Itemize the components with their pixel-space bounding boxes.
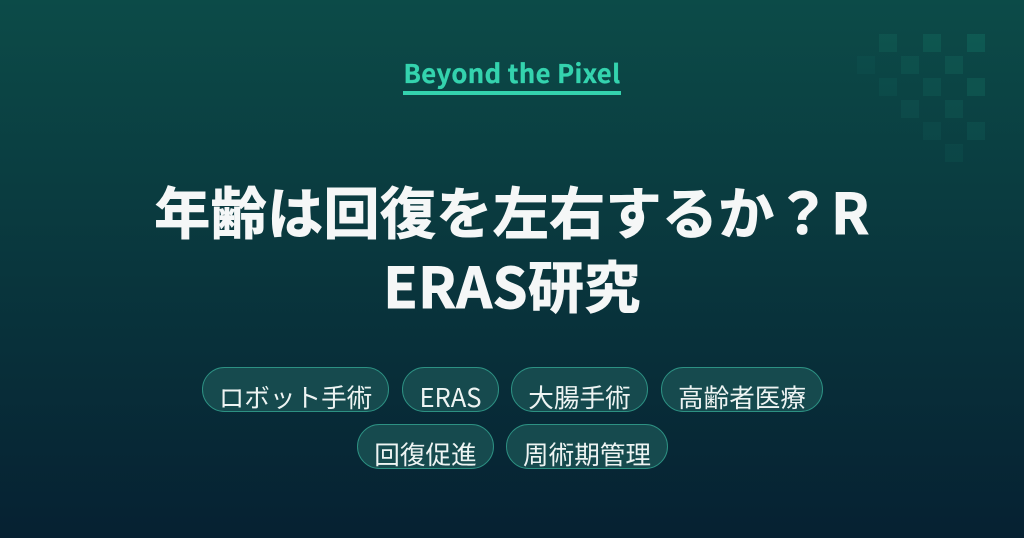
tag: 周術期管理: [506, 424, 668, 469]
tag: 高齢者医療: 高齢者医療: [678, 378, 806, 415]
tag: 回復促進: 回復促進: [374, 435, 477, 472]
decorative pixel grid icon: [879, 34, 985, 140]
tag: ERAS: [402, 367, 499, 412]
tag: ロボット手術: [202, 367, 389, 412]
title: [154, 170, 870, 325]
tag: 周術期管理: 周術期管理: [523, 435, 651, 472]
tag: 大腸手術: 大腸手術: [528, 378, 631, 415]
title: ERAS研究: [383, 244, 641, 325]
brand label: Beyond the Pixel: Beyond the Pixel: [403, 54, 621, 91]
tag: ERAS: ERAS: [419, 378, 482, 415]
tag: ロボット手術: ロボット手術: [219, 378, 372, 415]
tag: 高齢者医療: [661, 367, 823, 412]
tag: 回復促進: [357, 424, 494, 469]
tag: 大腸手術: [511, 367, 648, 412]
tags: [202, 367, 823, 472]
title: 年齢は回復を左右するか？R: [154, 170, 870, 251]
